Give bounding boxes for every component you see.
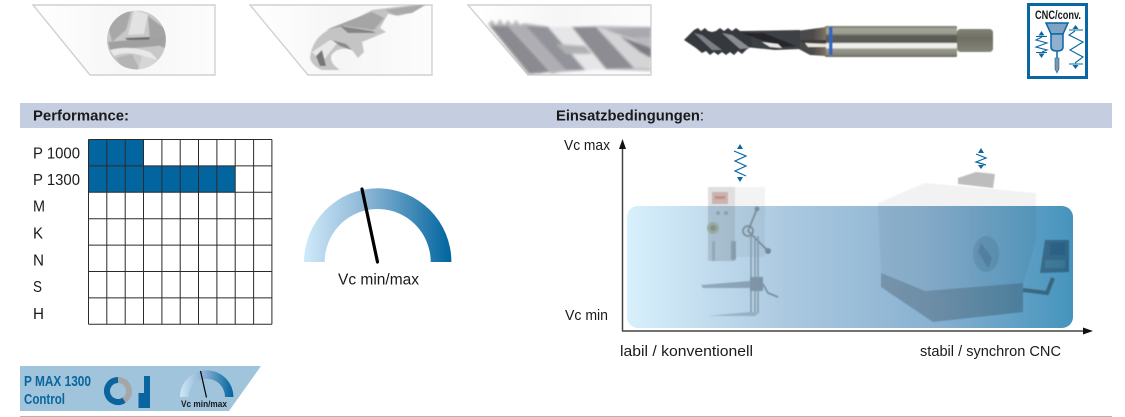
chart: Vc gauge bbox=[304, 188, 451, 288]
panel: tool thread view bbox=[468, 5, 651, 75]
label: Vc min: Vc min bbox=[565, 307, 608, 324]
row labels bbox=[33, 146, 80, 323]
icon: machine spindle bbox=[1046, 23, 1068, 73]
machine: CNC machining centre bbox=[878, 172, 1069, 322]
gauge needle bbox=[362, 189, 378, 262]
icon: thread close-up bbox=[488, 19, 651, 75]
y axis bbox=[619, 139, 626, 331]
label: stabil / synchron CNC: stabil / synchron CNC bbox=[920, 343, 1061, 360]
icon: spiral flute tip bbox=[310, 3, 427, 70]
label: labil / konventionell: labil / konventionell bbox=[620, 343, 753, 360]
bar: P 1300 bbox=[88, 166, 235, 192]
row labels: M bbox=[33, 198, 45, 216]
chart: operating conditions bbox=[564, 137, 1093, 360]
range: usable cutting speed area bbox=[627, 206, 1073, 328]
row labels: P 1000 bbox=[33, 146, 80, 162]
row labels: K bbox=[33, 226, 44, 242]
row labels: S bbox=[33, 279, 42, 296]
product name: P MAX 1300 bbox=[24, 374, 91, 390]
small gauge: Vc min/max bbox=[181, 399, 228, 410]
icon: spiral flute tap bbox=[684, 26, 993, 57]
product name: Control bbox=[24, 392, 65, 408]
icon: large vibration bbox=[1069, 25, 1083, 69]
label: CNC/conv.: CNC/conv. bbox=[1035, 10, 1081, 22]
icon: small vibration bbox=[1036, 31, 1047, 58]
icon: CNC / conventional machine bbox=[1028, 4, 1086, 78]
product badge: P MAX 1300 Control bbox=[20, 366, 261, 411]
panel: tool tip view bbox=[250, 3, 432, 75]
icon: step bar bbox=[138, 376, 150, 408]
section header band bbox=[20, 103, 1112, 128]
vibration icon: stable bbox=[976, 148, 986, 169]
chart: material performance grid bbox=[33, 140, 272, 324]
label: Vc max: Vc max bbox=[564, 137, 610, 154]
small gauge bbox=[180, 370, 233, 410]
heading: Einsatzbedingungen: Einsatzbedingungen: bbox=[556, 108, 704, 124]
vibration icon: labile bbox=[734, 144, 746, 182]
panel: tool front view bbox=[33, 5, 215, 75]
row labels: P 1300 bbox=[33, 172, 80, 189]
row labels: H bbox=[33, 306, 44, 323]
bar: P 1000 bbox=[88, 140, 144, 166]
icon: tool face bbox=[106, 10, 167, 70]
icon: coating ring bbox=[107, 380, 129, 402]
machine: conventional drill press bbox=[701, 187, 778, 316]
x axis bbox=[622, 328, 1093, 334]
heading: Performance: Performance: bbox=[33, 108, 129, 124]
row labels: N bbox=[33, 252, 44, 270]
gauge label: Vc min/max bbox=[338, 272, 419, 288]
